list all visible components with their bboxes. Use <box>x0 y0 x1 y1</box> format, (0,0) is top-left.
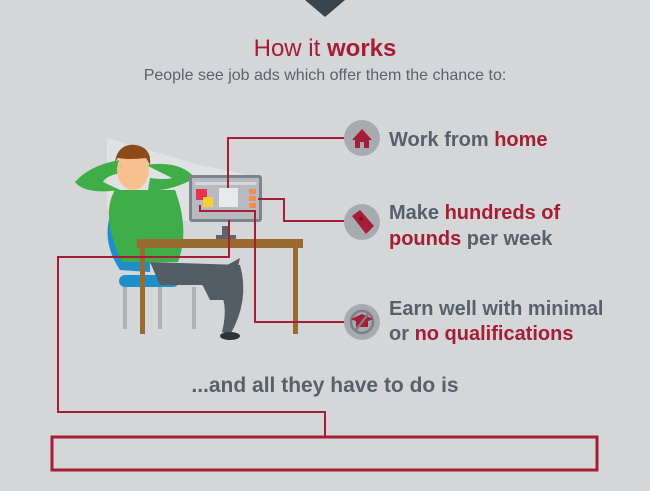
head <box>117 150 149 190</box>
subtitle: People see job ads which offer them the chance to: <box>144 67 506 84</box>
icon: money tag <box>344 204 380 240</box>
monitor <box>189 175 262 222</box>
lead-in text: ...and all they have to do is <box>191 374 459 397</box>
text: hundreds of pounds: Make hundreds of <box>389 202 560 224</box>
text: pounds per week <box>389 228 553 250</box>
icon: home <box>344 120 380 156</box>
text: or no qualifications <box>389 323 573 345</box>
torso <box>109 190 183 262</box>
desk <box>137 239 303 248</box>
title: How it works <box>254 35 396 62</box>
connector lines <box>58 138 344 437</box>
chair <box>108 210 150 272</box>
top pointer <box>305 0 345 17</box>
legs <box>150 262 243 335</box>
text: qualifications: Earn well with minimal <box>389 298 604 320</box>
empty box <box>52 437 597 470</box>
text: work from home: Work from home <box>389 129 548 151</box>
illustration: person at desk <box>75 138 303 340</box>
arms <box>75 160 124 191</box>
icon: no qualifications <box>344 304 380 340</box>
